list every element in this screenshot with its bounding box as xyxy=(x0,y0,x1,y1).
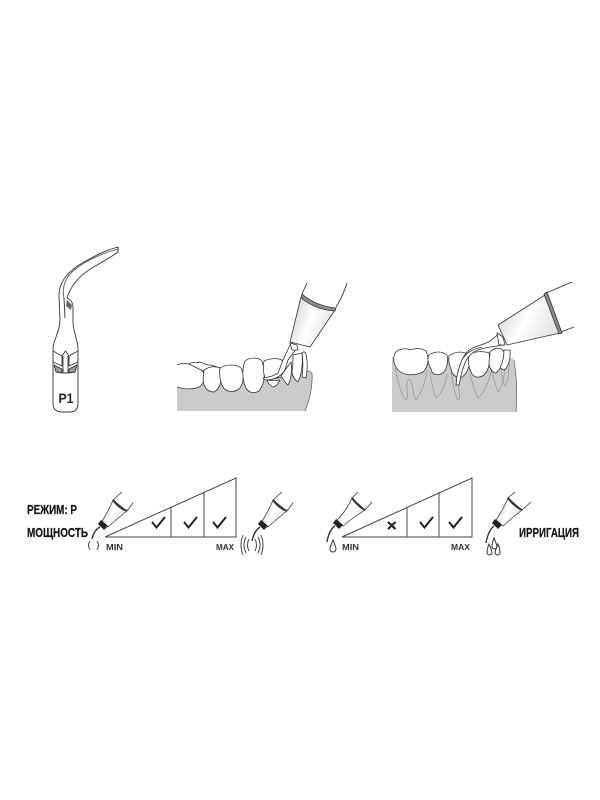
label: MIN: MIN xyxy=(342,542,359,552)
label: MAX: MAX xyxy=(451,542,470,552)
illustration: tip on upper teeth surface xyxy=(177,283,347,411)
teeth xyxy=(177,363,204,389)
label: power: МОЩНОСТЬ xyxy=(27,526,88,540)
label: irrigation: ИРРИГАЦИЯ xyxy=(519,526,579,540)
chart: power scale triangle xyxy=(105,478,236,552)
chart: irrigation scale triangle xyxy=(342,478,472,552)
label: P1: P1 xyxy=(58,390,74,406)
handpiece body xyxy=(290,297,335,347)
icon: handpiece, high vibration xyxy=(241,492,293,555)
handpiece body xyxy=(498,295,560,345)
icon: P1 scaler tip xyxy=(53,247,118,412)
teeth xyxy=(394,349,428,375)
gum xyxy=(177,372,312,411)
check marks xyxy=(152,517,226,528)
cross mark xyxy=(388,522,396,529)
roots xyxy=(395,362,509,400)
check marks xyxy=(420,517,462,528)
icon: handpiece, low irrigation xyxy=(327,492,372,552)
scaler tip xyxy=(456,335,503,385)
label: MAX: MAX xyxy=(216,542,234,552)
label: MIN: MIN xyxy=(106,542,123,552)
label: mode: РЕЖИМ: Р xyxy=(27,503,77,517)
gum xyxy=(392,357,517,412)
icon: handpiece, low vibration xyxy=(88,492,133,550)
illustration: tip in periodontal pocket with roots xyxy=(392,282,574,412)
scaler tip xyxy=(263,345,296,380)
icon: handpiece, high irrigation xyxy=(486,492,531,555)
